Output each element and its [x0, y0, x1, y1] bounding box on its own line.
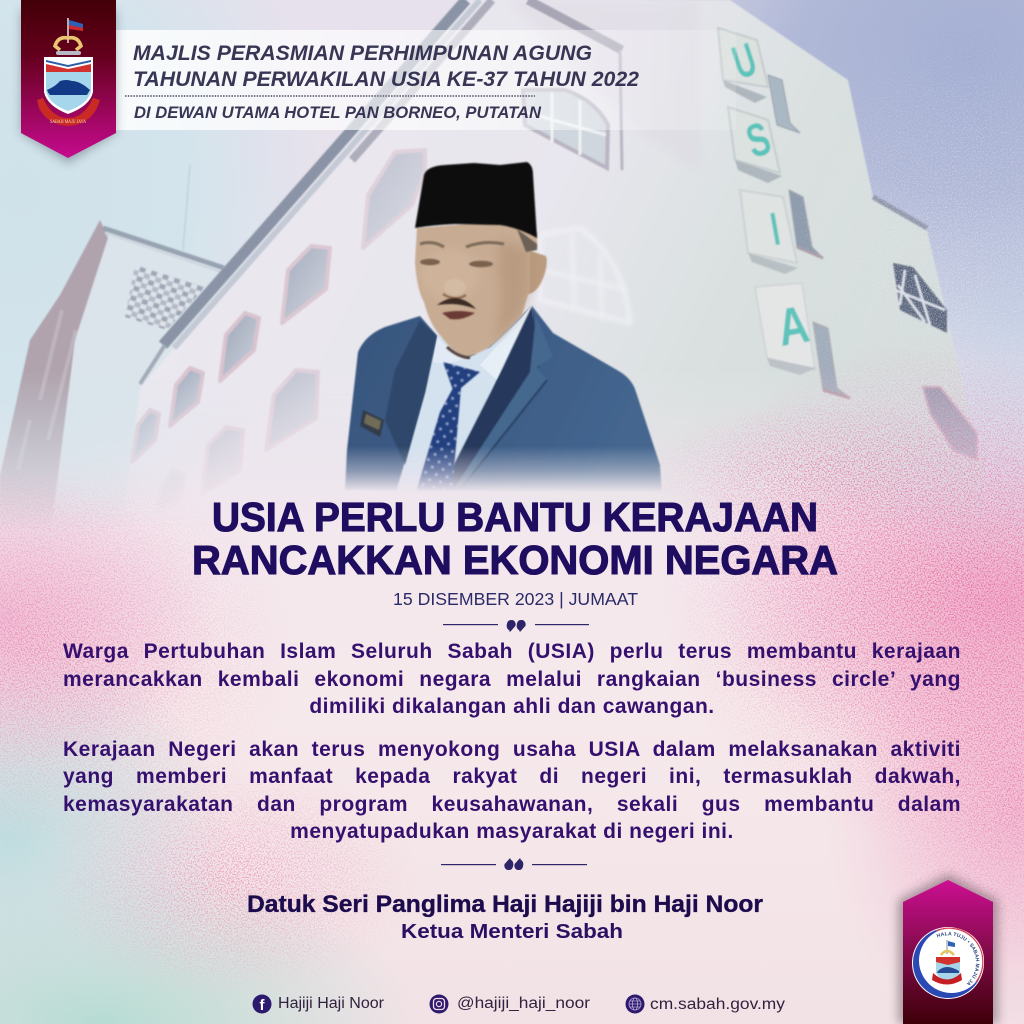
- building photo: [0, 0, 985, 540]
- lapels and shadow: [385, 306, 553, 492]
- USIA sign letters: [730, 42, 810, 347]
- shirt: [396, 306, 533, 492]
- speaker role: Ketua Menteri Sabah: [401, 920, 623, 943]
- footer icon: instagram: [430, 994, 448, 1014]
- body text: Warga Pertubuhan Islam Seluruh Sabah (USIA) perlu terus membantu kerajaan: [63, 640, 961, 663]
- arched windows: [132, 150, 425, 520]
- footer: facebook handle: Hajiji Haji Noor: [278, 995, 384, 1012]
- left tower: [0, 165, 224, 540]
- main title: [192, 494, 838, 583]
- header text block: MAJLIS PERASMIAN PERHIMPUNAN AGUNG: [133, 42, 592, 65]
- ribbon: [37, 98, 100, 126]
- body text: merancakkan kembali ekonomi negara melalui rangkaian ‘business circle’ yang: [63, 668, 961, 691]
- roof rail: [140, 0, 622, 384]
- lower centre window: [568, 244, 632, 324]
- body text: dimiliki dikalangan ahli dan cawangan.: [309, 695, 715, 718]
- main title: RANCAKKAN EKONOMI NEGARA: [192, 537, 838, 583]
- header text block: [125, 42, 639, 122]
- ear: [527, 250, 547, 294]
- header text block: DI DEWAN UTAMA HOTEL PAN BORNEO, PUTATAN: [134, 104, 542, 122]
- upper wall tone: [506, 0, 700, 175]
- USIA sign letters: I: [767, 204, 784, 256]
- speaker name: Datuk Seri Panglima Haji Hajiji bin Haji Noor: [247, 891, 763, 918]
- USIA sign letters: A: [773, 295, 813, 358]
- lapel badge: [360, 410, 384, 437]
- shield: [44, 57, 93, 114]
- neck tie: [416, 362, 480, 492]
- top-left banner with crest: [21, 0, 116, 163]
- eyebrows, eyes, nose, moustache, mouth: [420, 243, 504, 319]
- portrait of Datuk Seri Panglima Haji Hajiji: [345, 162, 662, 495]
- body text: Kerajaan Negeri akan terus menyokong usaha USIA dalam melaksanakan aktiviti: [63, 738, 961, 761]
- body text: yang memberi manfaat kepada rakyat di negeri ini, termasuklah dakwah,: [63, 765, 961, 788]
- USIA sign letters: U: [727, 34, 763, 90]
- body text: kemasyarakatan dan program keusahawanan, sekali gus membantu dalam: [63, 793, 961, 816]
- header text block: TAHUNAN PERWAKILAN USIA KE-37 TAHUN 2022: [133, 68, 639, 91]
- arms: [55, 38, 81, 50]
- body text: menyatupadukan masyarakat di negeri ini.: [290, 820, 734, 843]
- footer icon: facebook: [252, 994, 272, 1014]
- upper divider with quote mark: [443, 620, 589, 632]
- suit jacket: [345, 306, 662, 495]
- footer: instagram handle: @hajiji_haji_noor: [457, 995, 590, 1012]
- main facade: [136, 0, 970, 483]
- USIA sign letters: S: [740, 112, 777, 168]
- footer icon: facebook: f: [260, 997, 266, 1014]
- Hala Tuju round logo: HALA TUJU • SABAH MAJU JAYA: [936, 932, 980, 986]
- flag: [67, 18, 69, 43]
- USIA sign panels: [718, 28, 816, 375]
- right collar: [480, 305, 533, 380]
- Sabah state crest: [37, 18, 100, 126]
- footer icon: website globe: [626, 994, 644, 1014]
- side windows: [768, 75, 977, 460]
- Sabah state crest: SABAH MAJU JAYA: [50, 120, 86, 125]
- main title: USIA PERLU BANTU KERAJAAN: [212, 494, 818, 540]
- footer: website: cm.sabah.gov.my: [650, 996, 785, 1013]
- lower divider with quote mark: [441, 858, 587, 870]
- left collar: [433, 336, 464, 364]
- header translucent panel: [116, 30, 736, 130]
- date line: 15 DISEMBER 2023 | JUMAAT: [393, 589, 638, 609]
- face shading: [420, 229, 537, 358]
- face: [415, 222, 537, 357]
- body text: [63, 640, 961, 843]
- songkok hat: [415, 162, 537, 238]
- upper centre window: [523, 90, 608, 168]
